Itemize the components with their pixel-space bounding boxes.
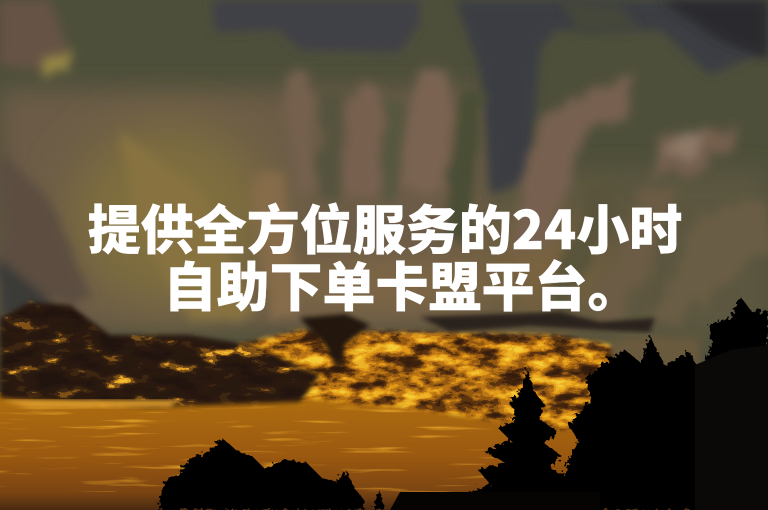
- trees: right mass: [545, 296, 768, 510]
- clouds: dark band and golden edges: [0, 295, 700, 440]
- tree: small distant: [373, 489, 385, 510]
- tree: slim conifer: [462, 368, 572, 500]
- tree silhouettes: [158, 296, 768, 510]
- title: [88, 189, 682, 322]
- house: [695, 345, 768, 510]
- roof and foreground: [390, 492, 600, 510]
- sun rays: [0, 52, 768, 320]
- horizontal golden cloud streaks: [0, 400, 530, 492]
- tree: lower left: [158, 438, 364, 510]
- title line 2: 自助下单卡盟平台。: [164, 246, 640, 322]
- lower golden sky: [0, 392, 768, 510]
- title line 1: 提供全方位服务的24小时: [88, 189, 682, 265]
